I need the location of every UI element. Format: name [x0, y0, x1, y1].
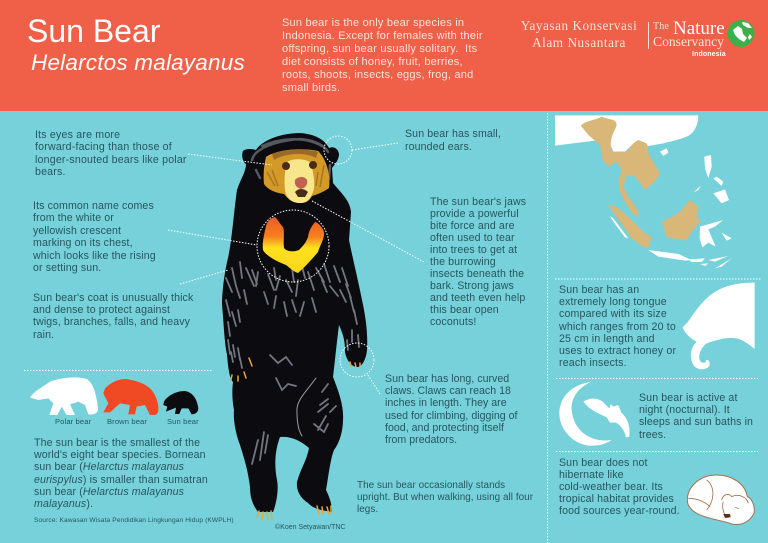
- icon: globe: [728, 20, 754, 47]
- brown bear: [103, 379, 158, 415]
- text: eyes: Its eyes are more: [35, 129, 120, 141]
- leader lines and circles: [168, 136, 424, 394]
- text: jaws: insects beneath the: [430, 268, 524, 280]
- text: jaws: provide a powerful: [430, 208, 519, 220]
- text: jaws: bite force and are: [430, 220, 515, 232]
- text: tongue: Sun bear has an: [559, 284, 639, 296]
- text: common name: marking on its chest,: [33, 237, 133, 249]
- intro text: Indonesia. Except for females with their: [282, 30, 483, 42]
- text: claws: food, and protecting itself: [385, 422, 504, 434]
- text: jaws: often used to tear: [430, 232, 515, 244]
- text: tongue: reach insects.: [559, 357, 627, 369]
- icon: long tongue: [683, 283, 755, 369]
- icon: crescent moon and bat: [559, 382, 630, 446]
- text: hibernate: Sun bear does not: [559, 457, 648, 469]
- fur highlights: [226, 139, 359, 464]
- label: sun bear: Sun bear: [167, 417, 199, 426]
- text: coat: and dense to protect against: [33, 304, 170, 316]
- label: polar bear: Polar bear: [55, 417, 91, 426]
- text: upright: upright. But when walking, using all four: [357, 492, 533, 503]
- text: eyes: forward-facing than those of: [35, 141, 172, 153]
- intro text: [282, 17, 483, 94]
- text: coat: [33, 292, 194, 341]
- claws: [231, 358, 360, 520]
- text: jaws: bark. Strong jaws: [430, 280, 514, 292]
- text: claws: Sun bear has long, curved: [385, 373, 509, 385]
- bear illustration: [222, 133, 367, 520]
- text: tongue: which ranges from 20 to: [559, 321, 676, 333]
- sun bear: [163, 391, 198, 414]
- text: hibernate: hibernate like: [559, 469, 624, 481]
- text: nocturnal: night (nocturnal). It: [639, 404, 730, 416]
- text: jaws: the burrowing: [430, 256, 496, 268]
- header band: [0, 0, 768, 111]
- text: eyes: [35, 129, 187, 178]
- text: ears: rounded ears.: [405, 141, 472, 153]
- source: Source: Kawasan Wisata Pendidikan Lingkungan Hidup (KWPLH): [34, 517, 234, 524]
- text: hibernate: food sources year-round.: [559, 505, 680, 517]
- text: claws: [385, 373, 518, 446]
- intro text: roots, shoots, insects, eggs, frog, and: [282, 69, 473, 81]
- text: tongue: compared with its size: [559, 308, 667, 320]
- label: brown bear: Brown bear: [107, 417, 147, 426]
- text: coat: Sun bear's coat is unusually thick: [33, 292, 193, 304]
- text: smallest bear: sun bear (Helarctus malayanus: [34, 461, 184, 473]
- text: claws: from predators.: [385, 434, 457, 446]
- text: smallest bear: sun bear (Helarctus malayanus: [34, 486, 184, 498]
- text: ears: Sun bear has small,: [405, 128, 501, 140]
- intro text: diet consists of honey, fruit, berries,: [282, 56, 463, 68]
- logo: The Nature Conservancy: Conservancy: [653, 34, 724, 49]
- text: jaws: into trees to get at: [430, 244, 517, 256]
- text: common name: or setting sun.: [33, 262, 101, 274]
- text: hibernate: [559, 457, 680, 517]
- text: common name: from the white or: [33, 212, 114, 224]
- intro text: offspring, sun bear usually solitary. Its: [282, 43, 477, 55]
- text: nocturnal: sleeps and sun baths in: [639, 416, 753, 428]
- text: nocturnal: trees.: [639, 429, 666, 441]
- logo: Yayasan Konservasi Alam Nusantara: Yayasan Konservasi: [521, 18, 637, 33]
- face: [264, 149, 329, 203]
- title: Sun Bear: [27, 13, 160, 49]
- text: tongue: 25 cm in length and: [559, 333, 655, 345]
- text: claws: claws. Claws can reach 18: [385, 385, 511, 397]
- text: smallest bear: eurispylus) is smaller than sumatran: [34, 474, 208, 486]
- text: tongue: extremely long tongue: [559, 296, 667, 308]
- scientific name: Helarctos malayanus: [31, 50, 245, 75]
- text: common name: which looks like the rising: [33, 250, 156, 262]
- text: jaws: coconuts!: [430, 316, 476, 328]
- text: smallest bear: [34, 437, 208, 510]
- intro text: Sun bear is the only bear species in: [282, 17, 464, 29]
- photo credit: ©Koen Setyawan/TNC: [275, 524, 346, 531]
- dividers: [24, 113, 761, 543]
- text: coat: rain.: [33, 329, 54, 341]
- eyes and nose: [282, 162, 290, 170]
- text: common name: yellowish crescent: [33, 225, 121, 237]
- text: nocturnal: [639, 392, 753, 441]
- intro text: small birds.: [282, 82, 340, 94]
- text: coat: twigs, branches, falls, and heavy: [33, 316, 190, 328]
- text: upright: legs.: [357, 504, 378, 515]
- polar bear: [30, 377, 98, 415]
- text: hibernate: tropical habitat provides: [559, 493, 674, 505]
- text: smallest bear: The sun bear is the smallest of the: [34, 437, 200, 449]
- logo: The Nature Conservancy: Nature: [673, 18, 725, 39]
- text: common name: Its common name comes: [33, 200, 154, 212]
- bear size comparison silhouettes: [30, 377, 198, 415]
- text: eyes: bears.: [35, 166, 66, 178]
- logo: The Nature Conservancy: Indonesia: [692, 51, 726, 58]
- text: jaws: this bear open: [430, 304, 499, 316]
- text: claws: used for climbing, digging of: [385, 410, 518, 422]
- logo: The Nature Conservancy: [648, 18, 726, 58]
- text: ears: [405, 128, 501, 153]
- text: claws: inches in length. They are: [385, 397, 507, 409]
- text: jaws: The sun bear's jaws: [430, 196, 526, 208]
- text: smallest bear: malayanus).: [34, 498, 93, 510]
- text: common name: [33, 200, 156, 274]
- text: smallest bear: world's eight bear species. Bornean: [34, 449, 206, 461]
- text: jaws: and teeth even help: [430, 292, 525, 304]
- logo: Yayasan Konservasi Alam Nusantara: [520, 18, 637, 50]
- map: Southeast Asia: [555, 115, 732, 268]
- icon: sleeping bear: [687, 475, 754, 524]
- text: upright: [357, 480, 533, 515]
- text: tongue: [559, 284, 676, 369]
- text: upright: The sun bear occasionally stands: [357, 480, 505, 491]
- text: eyes: longer-snouted bears like polar: [35, 154, 187, 166]
- text: nocturnal: Sun bear is active at: [639, 392, 738, 404]
- logo: The Nature Conservancy: The: [653, 21, 669, 32]
- bear body: [222, 133, 367, 512]
- text: hibernate: cold-weather bear. Its: [559, 481, 663, 493]
- text: tongue: uses to extract honey or: [559, 345, 676, 357]
- logo: Yayasan Konservasi Alam Nusantara: Alam Nusantara: [532, 35, 626, 50]
- text: jaws: [430, 196, 526, 328]
